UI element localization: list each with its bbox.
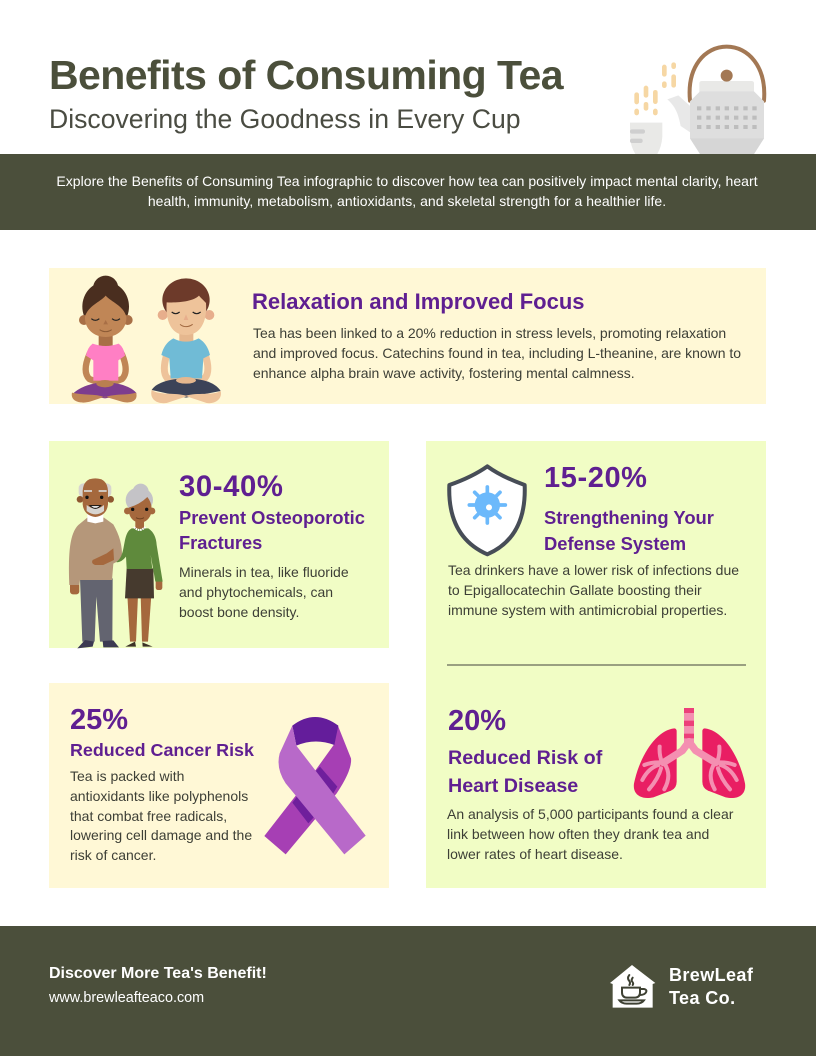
heading: defense system (544, 507, 714, 554)
stat: 20%: 20% (448, 705, 506, 737)
icon: lungs (634, 708, 746, 798)
text: heart: An analysis of 5,000 participants found a clear (447, 806, 733, 822)
text: defense: Tea drinkers have a lower risk of infections due (448, 562, 739, 578)
stat: 25%: 25% (70, 704, 128, 736)
icon: teapot and cup (630, 44, 766, 154)
heading: heart disease: Reduced Risk of (448, 747, 602, 769)
stat: 30-40%: 30-40% (179, 470, 284, 503)
icon: elderly couple (68, 478, 163, 648)
heading: heart disease: Heart Disease (448, 775, 578, 797)
text: cancer: risk of cancer. (70, 847, 156, 863)
text: heart (447, 806, 734, 862)
subtitle: Discovering the Goodness in Every Cup (49, 104, 521, 134)
text: relaxation (253, 325, 741, 381)
footer call to action: Discover More Tea's Benefit! (49, 965, 267, 982)
stat: 15-20%: 15-20% (544, 462, 648, 494)
text: defense: immune system with antimicrobial properties. (448, 602, 727, 618)
text: relaxation: enhance alpha brain wave activity, fostering mental calmness. (253, 365, 635, 381)
text: osteoporotic: boost bone density. (179, 604, 299, 620)
heading: prevent fractures (179, 507, 365, 553)
icon: purple ribbon (264, 717, 366, 854)
brand name: Tea Co. (669, 988, 735, 1008)
footer url: www.brewleafteaco.com (49, 990, 204, 1006)
heading: heart disease (448, 747, 602, 797)
intro text: health, immunity, metabolism, antioxidants, and skeletal strength for a healthier life. (148, 192, 666, 208)
intro text (56, 173, 758, 209)
footer (0, 926, 816, 1056)
brand name (669, 965, 753, 1008)
panel: defense and heart (426, 441, 766, 888)
text: cancer: lowering cell damage and the (70, 827, 252, 843)
heading: defense system: Strengthening Your (544, 507, 714, 528)
heading: prevent fractures: Prevent Osteoporotic (179, 507, 365, 528)
title: Benefits of Consuming Tea (49, 52, 563, 98)
text: relaxation: and improved focus. Catechins found in tea, including L-theanine, are known to (253, 345, 741, 361)
text: osteoporotic: Minerals in tea, like fluoride (179, 564, 349, 580)
text: cancer: Tea is packed with (70, 768, 184, 784)
text: cancer (70, 768, 252, 863)
panel: osteoporotic fractures (49, 441, 389, 648)
brand name: BrewLeaf (669, 965, 753, 985)
intro text: Explore the Benefits of Consuming Tea infographic to discover how tea can positively impact mental clarity, heart (56, 173, 758, 189)
text: defense: to Epigallocatechin Gallate boosting their (448, 582, 702, 598)
intro band (0, 154, 816, 230)
text: osteoporotic: and phytochemicals, can (179, 584, 333, 600)
text: cancer: antioxidants like polyphenols (70, 788, 248, 804)
icon: meditating couple (72, 276, 221, 404)
icon: shield with germ (447, 464, 527, 556)
heading: relaxation: Relaxation and Improved Focus (252, 289, 585, 314)
text: heart: lower rates of heart disease. (447, 846, 623, 862)
panel: relaxation and improved focus (49, 268, 766, 404)
text: cancer: that combat free radicals, (70, 808, 227, 824)
panel: reduced cancer risk (49, 683, 389, 888)
heading: prevent fractures: Fractures (179, 532, 262, 553)
text: defense (448, 562, 739, 618)
heading: reduced cancer risk: Reduced Cancer Risk (70, 740, 254, 760)
heading: defense system: Defense System (544, 533, 686, 554)
text: heart: link between how often they drank tea and (447, 826, 709, 842)
text: relaxation: Tea has been linked to a 20% reduction in stress levels, promoting relaxation (253, 325, 726, 341)
text: osteoporotic (179, 564, 349, 620)
icon: tea house logo (610, 965, 656, 1008)
